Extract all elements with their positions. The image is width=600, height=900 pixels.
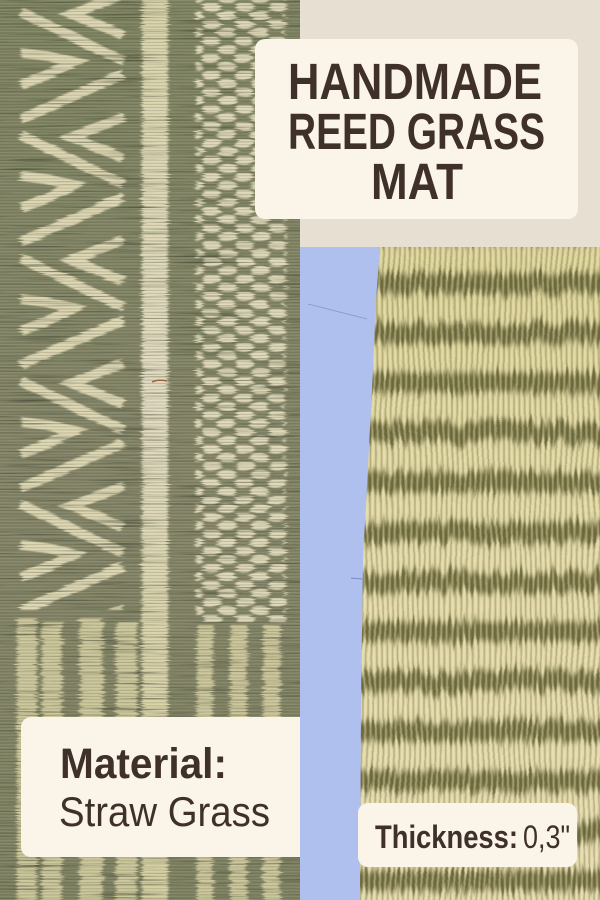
material label: Material: — [60, 740, 227, 788]
title card — [255, 39, 578, 219]
panel: patterned woven mat, left — [0, 0, 300, 900]
title line 1: HANDMADE — [288, 53, 542, 110]
diamond woven pattern — [196, 0, 286, 622]
zigzag woven pattern — [17, 0, 130, 610]
background: beige top-right panel — [300, 0, 600, 247]
blue backdrop panel — [300, 247, 390, 900]
material value: Straw Grass — [59, 788, 270, 835]
central vertical stripe — [142, 0, 168, 900]
material card — [21, 717, 300, 857]
thickness label: Thickness: — [375, 819, 518, 855]
thickness card — [358, 803, 577, 867]
thickness value: 0,3" — [523, 819, 570, 855]
vertical stripes, lower border — [17, 618, 280, 900]
panel: close-up of reed grass mat, right — [350, 230, 600, 900]
title line 3: MAT — [371, 153, 463, 210]
